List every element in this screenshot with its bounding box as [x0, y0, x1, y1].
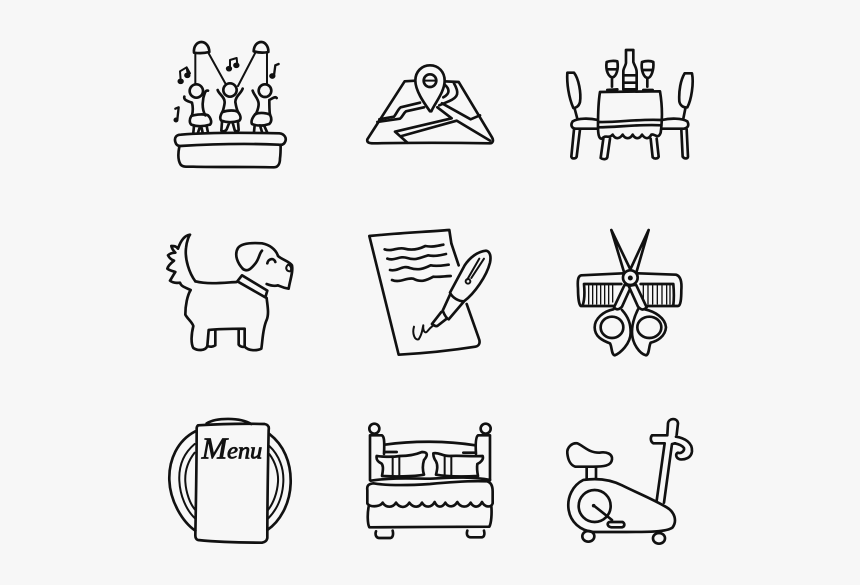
text: Menu label: Menu — [201, 432, 262, 466]
icon: document with fountain pen — [369, 230, 490, 355]
icon: scissors and comb — [578, 230, 681, 355]
icon: dog with collar — [167, 235, 292, 350]
icon: map with location pin — [367, 65, 493, 143]
icon: dining table with wine and chairs — [567, 50, 693, 159]
icon: menu on a plate — [169, 419, 291, 543]
icon: stage with three dancers — [174, 42, 286, 167]
icon: double bed — [367, 424, 493, 538]
icon: exercise bike — [567, 419, 692, 544]
